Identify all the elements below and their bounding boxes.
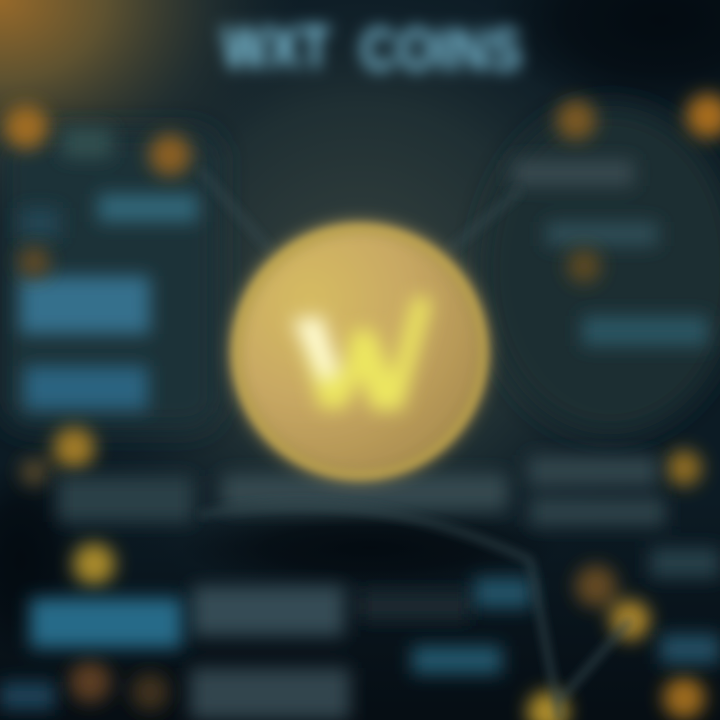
right orange dots	[69, 94, 720, 720]
connector lines	[200, 170, 630, 720]
title: COINS	[360, 16, 522, 83]
coin letter W	[292, 296, 432, 410]
left orange dots	[4, 105, 191, 585]
lower grey text blocks	[58, 456, 720, 720]
coin	[232, 224, 488, 480]
title	[222, 14, 522, 83]
left panel	[0, 130, 220, 430]
title: WXT	[222, 14, 330, 81]
left panel text blocks	[20, 128, 198, 410]
lower blue text blocks	[0, 578, 720, 710]
right panel text blocks	[512, 160, 708, 346]
coin rim glow	[237, 229, 483, 475]
right panel	[480, 105, 720, 435]
